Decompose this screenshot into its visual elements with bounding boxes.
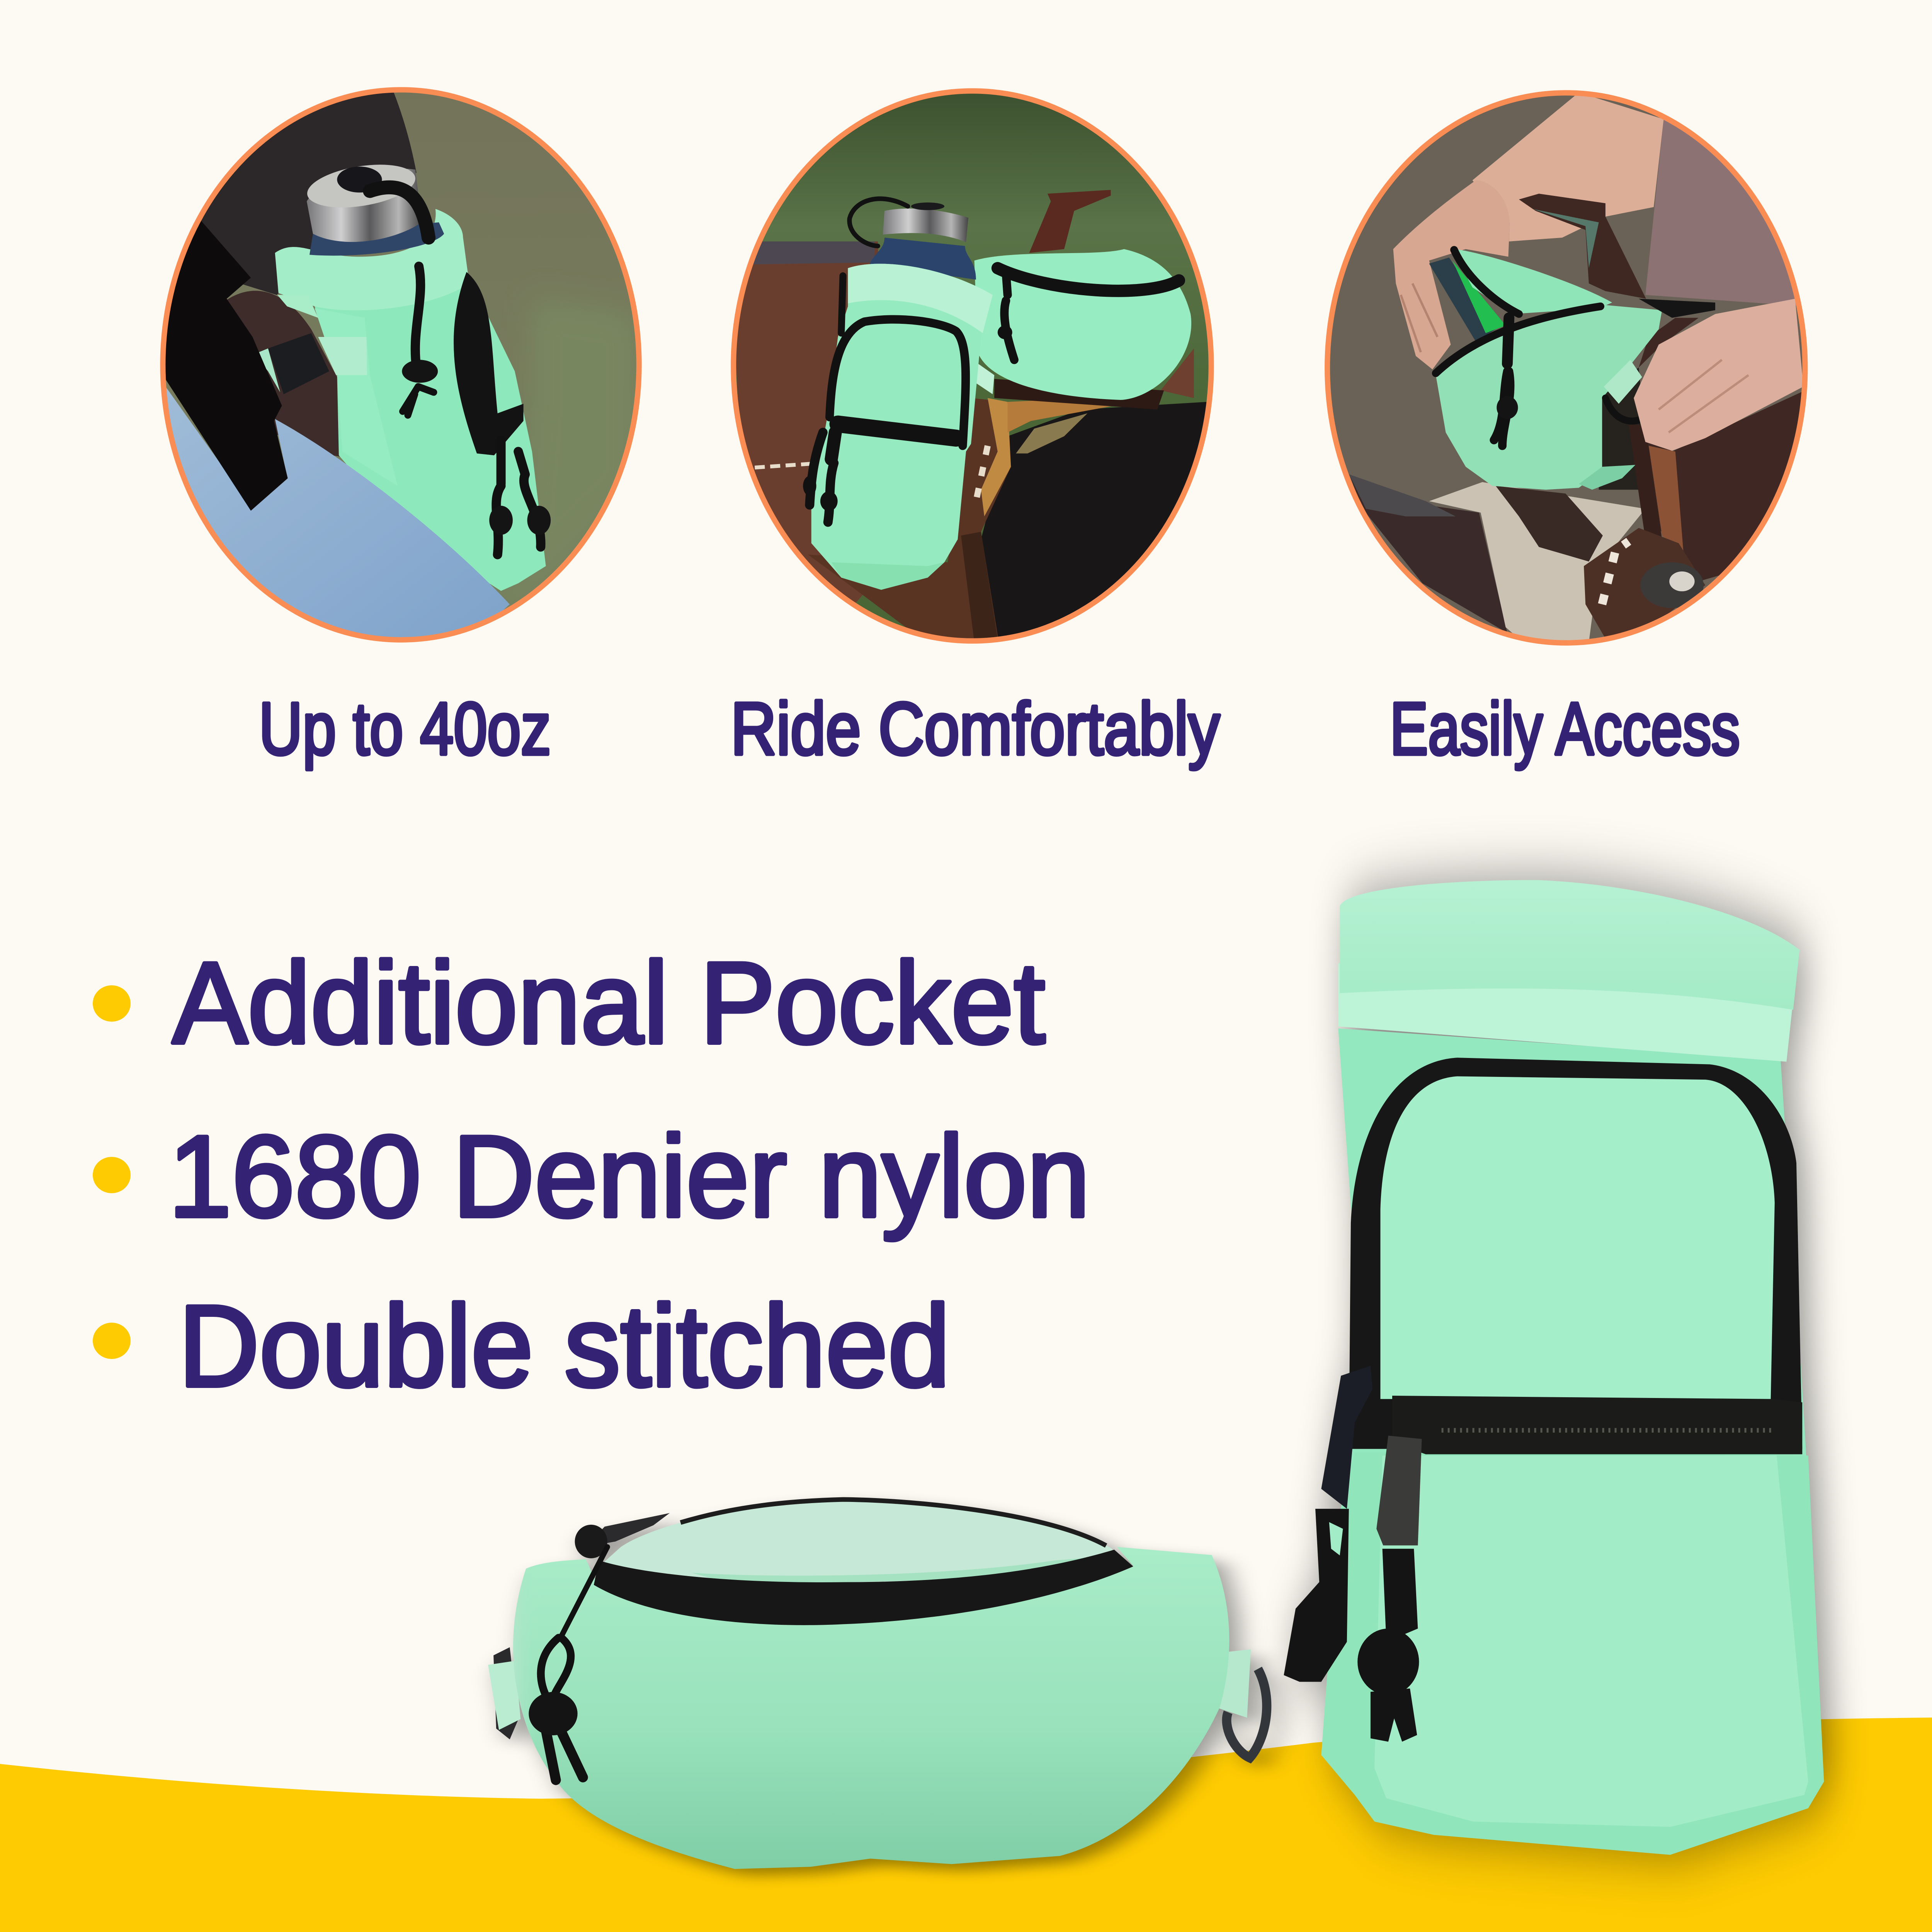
pouch bottom [831,562,944,590]
bullet 1 [93,985,131,1022]
lower zipper [1392,1396,1802,1454]
black shirt [163,220,288,511]
waist bag [973,249,1191,400]
feature: 1680 denier nylon: 1680 Denier nylon [168,1111,1090,1242]
orange ring [1327,93,1805,643]
pouch zipper [830,319,966,446]
tooled leather [218,291,356,459]
front cord [1383,1549,1418,1642]
caption: easily access: Easily Access [1390,687,1740,770]
pocket panel [1380,1076,1775,1399]
yellow wave [0,1718,1932,1932]
panel: easily access photo [1319,85,1812,650]
zipper pulls [496,440,541,554]
zipper [1436,306,1600,373]
left strap [493,1647,518,1740]
saddle horn [1029,190,1111,253]
main zipper [594,1549,1133,1625]
orange ring [733,91,1211,641]
buckle [1639,299,1715,318]
main body [513,1547,1229,1869]
tooled floral leather [1649,446,1684,554]
bullet 3 [93,1323,131,1359]
caption: ride comfortably: Ride Comfortably [731,687,1220,770]
top panel [594,1501,1131,1593]
pouch pull [831,432,835,459]
front zip pull [1376,1435,1422,1545]
side zipper [454,272,524,455]
bag strap [1604,360,1642,404]
lower panel [1321,1452,1824,1855]
bag body [315,272,546,591]
pouch cuff [848,264,993,333]
steel lid [307,168,422,242]
saddle horn [1519,194,1646,299]
bullet list [93,938,1090,1411]
right strap [1214,1650,1251,1718]
horse mane [201,93,417,295]
right hand [1634,299,1803,451]
caption: up to 40oz: Up to 40oz [259,687,551,770]
cuff fold [1338,963,1797,1062]
side zip pull [1321,1366,1372,1509]
saddle strap [961,532,998,643]
bag body [1436,304,1662,490]
saddle skirt [808,398,1011,639]
saddle trim leaf [1016,413,1087,453]
bottle pouch [811,264,993,590]
zip pull [586,1513,670,1547]
saddle pad [1429,482,1645,643]
orange ring [163,90,639,640]
panel: up to 40oz photo [156,85,646,646]
back zipper [680,1500,1106,1546]
bag collar [275,209,469,310]
horse [1349,474,1507,633]
side cord [1284,1509,1349,1682]
dark bag interior [1599,367,1645,490]
arm [1472,92,1664,242]
cord [541,1638,571,1699]
feature: additional pocket: Additional Pocket [172,938,1046,1068]
d-ring [1227,1669,1267,1758]
lid loop [337,167,382,192]
waist bag product [488,1500,1267,1869]
tooled leather [1639,318,1805,582]
jeans [163,383,510,646]
buckle [268,333,329,394]
drawcord [415,266,420,367]
pocket zipper frame [1349,1058,1802,1449]
saddle strap [1629,425,1662,539]
horse body [915,402,1207,646]
saddle seat [731,242,888,612]
rosette [1584,528,1705,639]
left hand [1393,180,1510,369]
zipper pull [1507,318,1509,364]
bottle [869,238,976,280]
webbing strap [318,337,367,375]
panel: ride comfortably photo [728,85,1221,650]
bag flap [1452,249,1612,314]
feature: double stitched: Double stitched [179,1281,950,1411]
cuff top [1340,880,1799,1010]
bag side shade [315,308,398,486]
bottle navy [310,222,444,256]
bullet 2 [93,1157,131,1193]
bottle pouch product [1284,880,1824,1855]
saddle rear [1161,349,1194,398]
pouch body [1321,1028,1824,1855]
phone [1429,257,1496,342]
shirt [1645,119,1805,306]
